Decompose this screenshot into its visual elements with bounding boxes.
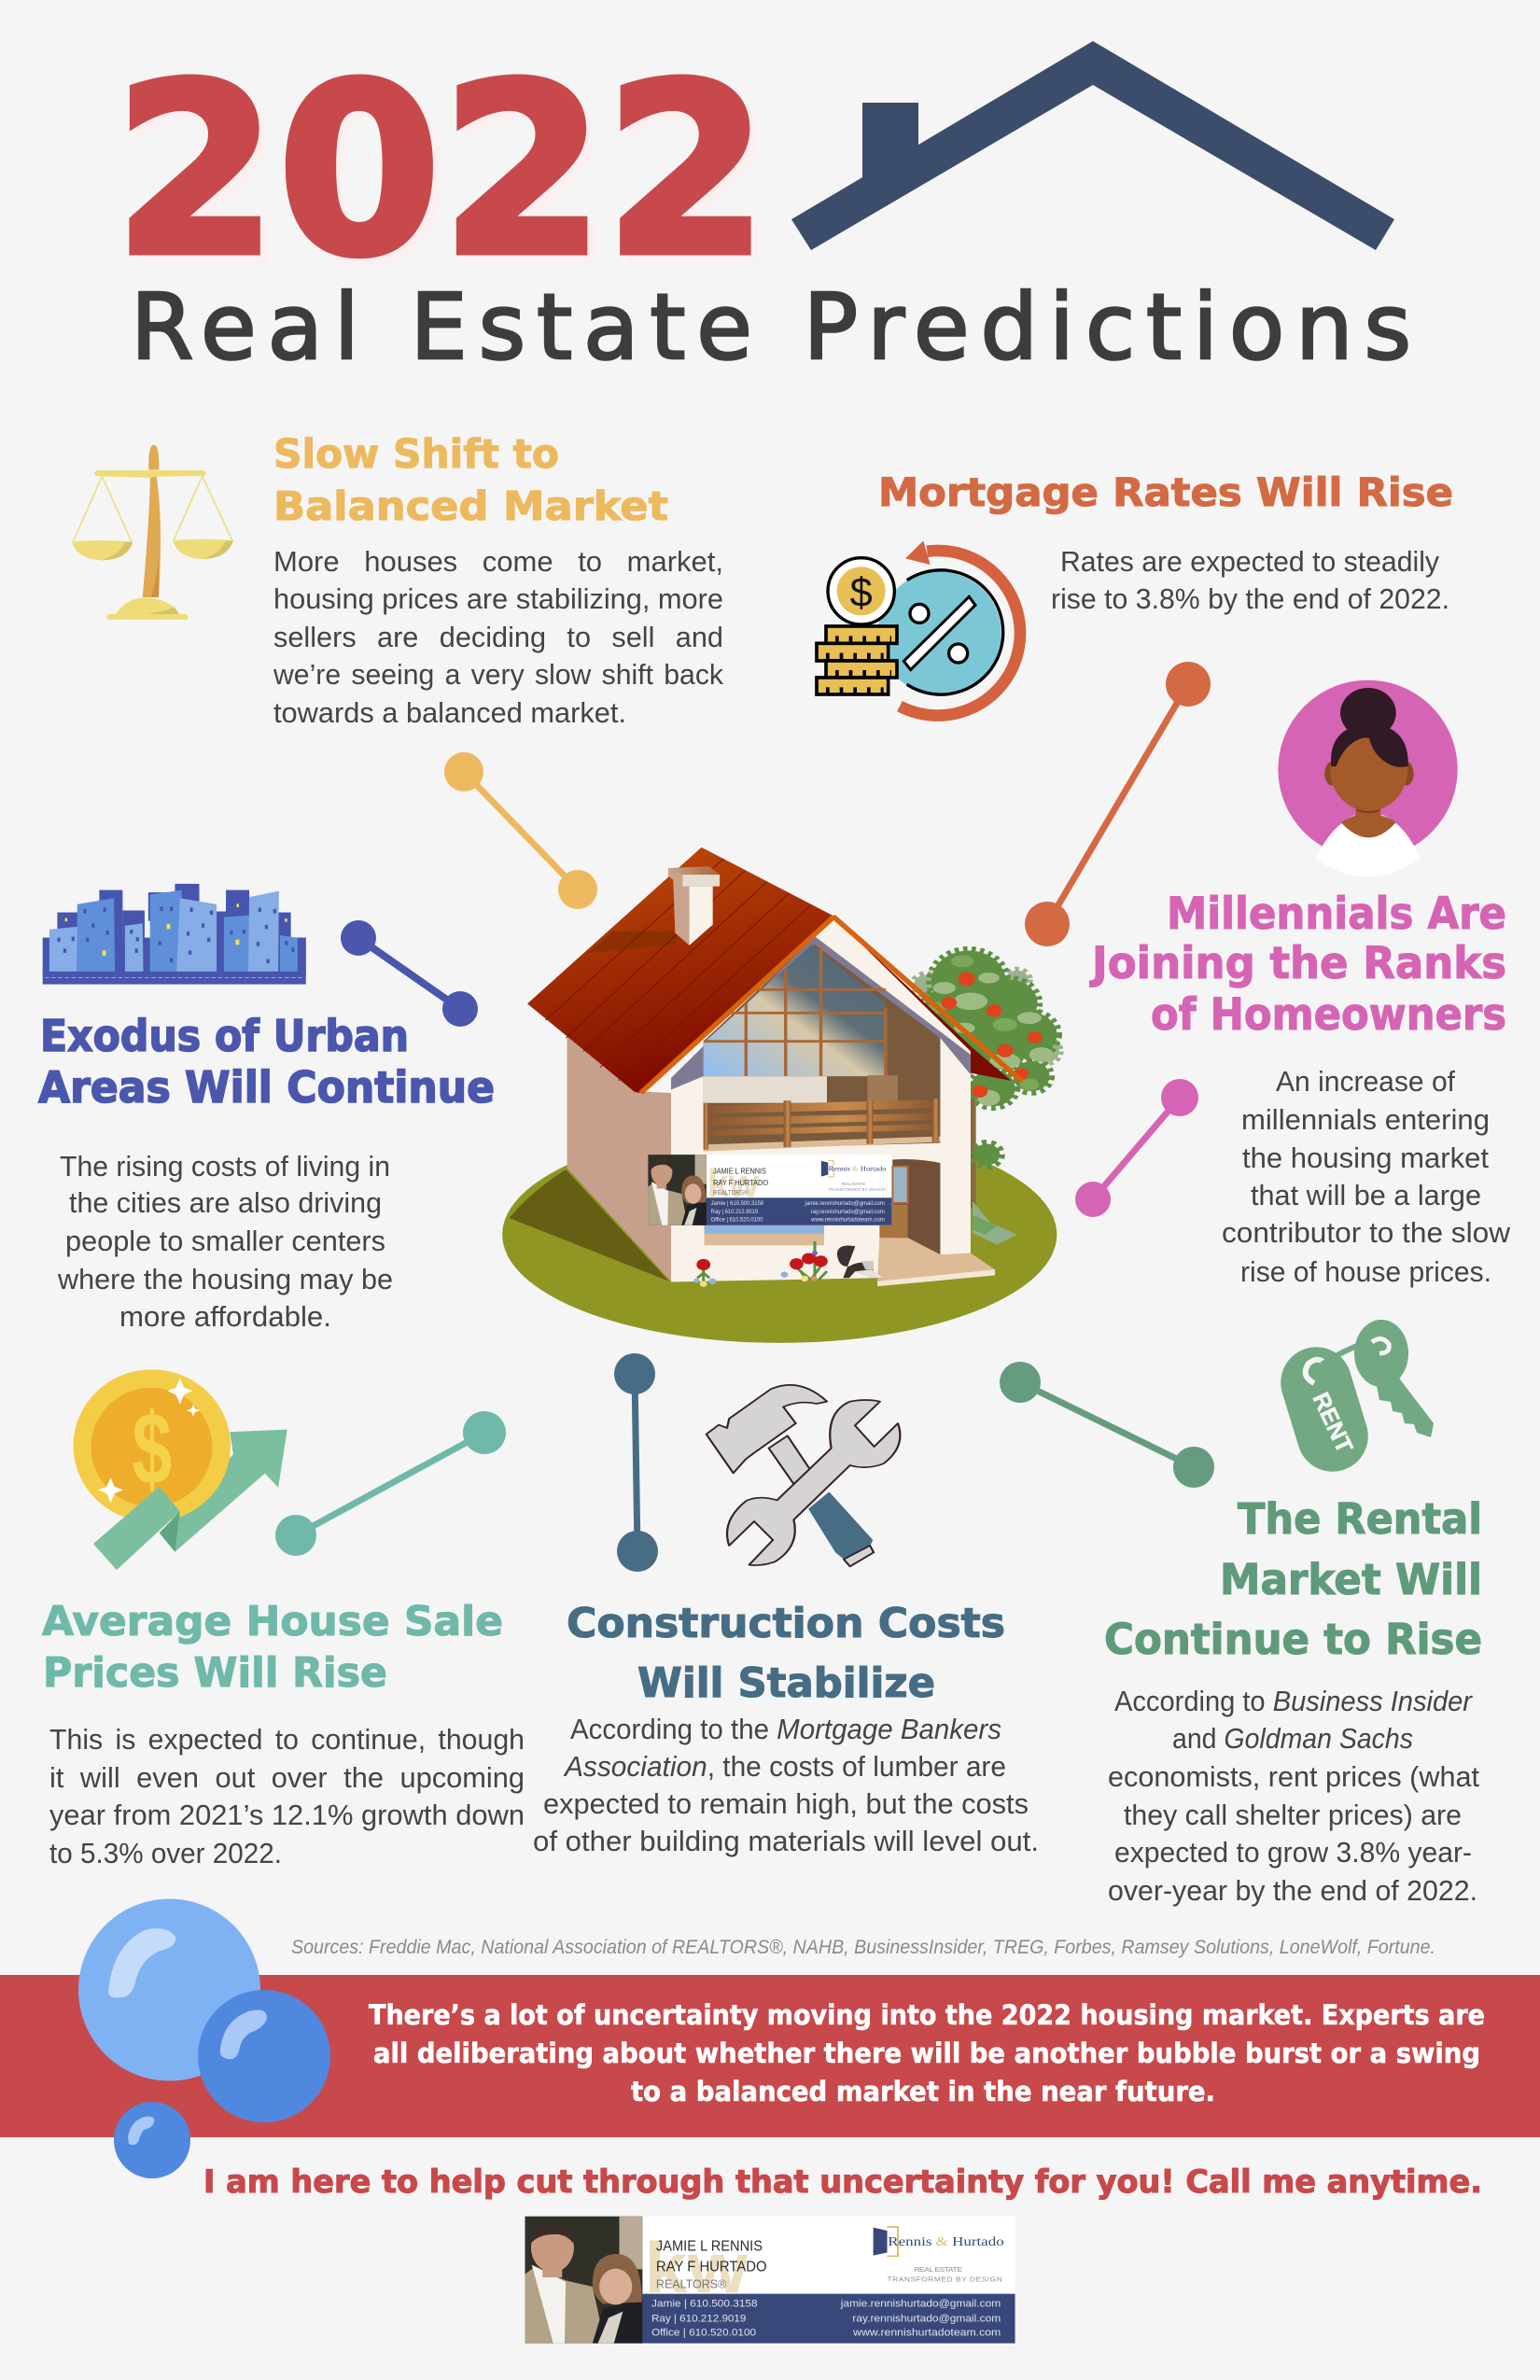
heading: The Rental <box>1238 1494 1482 1544</box>
icon: bubbles <box>78 1898 330 2178</box>
flowers <box>693 1241 828 1287</box>
heading: Exodus of Urban <box>40 1011 409 1061</box>
body text <box>49 1723 525 1869</box>
body text: where the housing may be <box>57 1263 393 1295</box>
connector <box>444 752 597 909</box>
body text: expected to remain high, but the costs <box>543 1787 1029 1820</box>
signage: agent business card: kw <box>707 1162 759 1207</box>
signage: agent business card: www.rennishurtadoteam.com <box>810 1216 885 1223</box>
signage: agent business card: jamie.rennishurtado@gmail.com <box>805 1200 885 1207</box>
signage: agent business card <box>648 1155 891 1225</box>
icon: woman portrait <box>1278 680 1458 876</box>
heading: Balanced Market <box>273 483 668 530</box>
heading: Millennials Are <box>1167 889 1506 940</box>
icon: rent tag and key <box>1272 1320 1434 1480</box>
body text: the cities are also driving <box>69 1186 382 1219</box>
heading: Prices Will Rise <box>43 1649 387 1697</box>
body text: rise of house prices. <box>1240 1255 1491 1288</box>
body text: An increase of <box>1276 1065 1455 1098</box>
title: 2022: 2022 <box>114 35 768 308</box>
banner text: all deliberating about whether there will be another bubble burst or a swing <box>373 2037 1480 2069</box>
agent business card: Jamie | 610.500.3158 <box>651 2297 758 2309</box>
signage: agent business card: Rennis & Hurtado <box>829 1165 887 1173</box>
body text <box>57 1150 393 1333</box>
walls <box>567 1034 671 1281</box>
chimney <box>668 866 720 945</box>
body text: sellers are deciding to sell and <box>273 621 723 653</box>
panel: rental market <box>1000 1320 1482 1907</box>
body text: This is expected to continue, though <box>49 1723 525 1756</box>
signage: agent business card: Ray | 610.212.9019 <box>711 1209 758 1215</box>
illustration: central house <box>502 847 1059 1343</box>
connector <box>275 1411 506 1556</box>
panel: construction costs <box>533 1353 1039 1857</box>
roof <box>527 847 834 1093</box>
porch <box>877 1238 995 1286</box>
heading <box>273 431 668 530</box>
panel: mortgage rates will rise <box>817 469 1453 946</box>
signage: agent business card: REALTORS® <box>713 1189 749 1197</box>
icon: gold coin and rising arrow <box>74 1369 287 1570</box>
connector <box>341 920 478 1027</box>
agent business card <box>525 2217 1015 2344</box>
body text: that will be a large <box>1251 1179 1481 1211</box>
body text: of other building materials will level out. <box>533 1825 1039 1857</box>
sources line: Sources: Freddie Mac, National Association of REALTORS®, NAHB, BusinessInsider, TREG, Forbes, Ramsey Solutions, LoneWolf, Fortune. <box>291 1937 1435 1958</box>
agent business card: Rennis & Hurtado <box>888 2235 1004 2249</box>
heading <box>1104 1494 1482 1664</box>
heading: Slow Shift to <box>273 431 559 478</box>
body text: the housing market <box>1242 1141 1489 1174</box>
body text: people to smaller centers <box>65 1225 385 1257</box>
body text: they call shelter prices) are <box>1124 1799 1462 1831</box>
agent business card: JAMIE L RENNIS <box>656 2239 763 2254</box>
body text: over-year by the end of 2022. <box>1108 1874 1477 1907</box>
body text: towards a balanced market. <box>273 696 626 729</box>
signage: agent business card: RAY F HURTADO <box>713 1178 768 1187</box>
lower floor door and window <box>892 1159 940 1254</box>
signage: agent business card: JAMIE L RENNIS <box>713 1167 766 1176</box>
body text: expected to grow 3.8% year- <box>1114 1836 1472 1869</box>
agent business card: kw <box>644 2229 749 2308</box>
panel: slow shift to balanced market <box>72 431 723 909</box>
panel: exodus of urban areas <box>38 884 495 1333</box>
agent business card: www.rennishurtadoteam.com <box>852 2326 1001 2338</box>
ground <box>502 1127 1057 1343</box>
body text: more affordable. <box>119 1300 331 1333</box>
body text <box>1108 1685 1479 1907</box>
heading <box>1089 889 1506 1041</box>
upper floor interior <box>704 936 940 1150</box>
agent business card: REAL ESTATE <box>914 2265 962 2274</box>
panel: millennials <box>1075 680 1511 1288</box>
icon: percent and coins <box>817 540 1020 716</box>
agent business card: Ray | 610.212.9019 <box>651 2312 747 2324</box>
heading: Joining the Ranks <box>1089 938 1506 989</box>
body text: contributor to the slow <box>1222 1216 1511 1249</box>
balcony floor and railing <box>704 1136 940 1152</box>
connector <box>614 1353 658 1572</box>
subtitle: Real Estate Predictions <box>131 274 1411 380</box>
body text: The rising costs of living in <box>60 1150 390 1183</box>
signage: agent business card: TRANSFORMED BY DESIGN <box>828 1187 886 1192</box>
icon: rent tag and key: RENT <box>1308 1389 1358 1457</box>
heading: Mortgage Rates Will Rise <box>878 469 1453 515</box>
heading: Continue to Rise <box>1104 1615 1482 1664</box>
agent business card: ray.rennishurtado@gmail.com <box>852 2312 1001 2324</box>
agent business card: RAY F HURTADO <box>656 2259 767 2275</box>
body text: rise to 3.8% by the end of 2022. <box>1051 582 1449 615</box>
body text: Rates are expected to steadily <box>1060 545 1439 578</box>
body text: millennials entering <box>1241 1103 1490 1136</box>
heading: Average House Sale <box>42 1598 503 1645</box>
body text: According to the Mortgage Bankers <box>570 1713 1001 1745</box>
body text <box>533 1713 1039 1857</box>
body text: to 5.3% over 2022. <box>49 1837 282 1869</box>
connector <box>1025 662 1211 946</box>
apple tree <box>914 951 1059 1245</box>
heading: of Homeowners <box>1151 989 1506 1041</box>
body text: we’re seeing a very slow shift back <box>273 658 723 691</box>
icon: percent and coins: $ <box>850 570 873 615</box>
body text: housing prices are stabilizing, more <box>273 582 723 615</box>
icon: balance scale <box>72 445 233 620</box>
heading: Construction Costs <box>567 1600 1005 1647</box>
body text: year from 2021’s 12.1% growth down <box>49 1799 525 1831</box>
panel: red banner <box>0 1975 1540 2137</box>
connector <box>1000 1362 1214 1488</box>
agent business card: Office | 610.520.0100 <box>651 2326 756 2338</box>
banner text: There’s a lot of uncertainty moving into the 2022 housing market. Experts are <box>369 1999 1485 2031</box>
window frames <box>704 946 886 1076</box>
body text: economists, rent prices (what <box>1108 1760 1479 1793</box>
agent business card: jamie.rennishurtado@gmail.com <box>840 2297 1001 2309</box>
icon: city skyline <box>43 884 306 985</box>
body text: it will even out over the upcoming <box>49 1761 525 1794</box>
cat <box>837 1246 884 1278</box>
signage: agent business card: REAL ESTATE <box>842 1182 865 1186</box>
agent business card: TRANSFORMED BY DESIGN <box>888 2275 1002 2283</box>
call to action: I am here to help cut through that uncertainty for you! Call me anytime. <box>203 2163 1482 2201</box>
signage: agent business card: ray.rennishurtado@gmail.com <box>811 1209 885 1215</box>
icon: roof with chimney <box>791 41 1394 250</box>
body text <box>1222 1065 1511 1288</box>
heading: Areas Will Continue <box>38 1062 495 1113</box>
heading <box>567 1600 1005 1707</box>
heading <box>38 1011 495 1113</box>
agent business card: REALTORS® <box>656 2278 726 2290</box>
body text: More houses come to market, <box>273 545 723 578</box>
body text <box>1051 545 1449 615</box>
body text: According to Business Insider <box>1114 1685 1474 1717</box>
banner text <box>369 1999 1485 2107</box>
panel: average house sale prices <box>42 1369 525 1869</box>
body text: Association, the costs of lumber are <box>563 1750 1006 1783</box>
heading: Will Stabilize <box>637 1659 935 1707</box>
heading <box>42 1598 503 1697</box>
connector <box>1075 1079 1198 1217</box>
icon: hammer and wrench <box>707 1385 900 1566</box>
icon: gold coin and rising arrow: $ <box>132 1392 172 1506</box>
body text: and Goldman Sachs <box>1172 1722 1413 1755</box>
signage: agent business card: Jamie | 610.500.3158 <box>711 1200 764 1207</box>
heading: Market Will <box>1220 1555 1482 1604</box>
body text <box>273 545 723 729</box>
banner text: to a balanced market in the near future. <box>631 2076 1215 2107</box>
signage: agent business card: Office | 610.520.0100 <box>711 1216 763 1223</box>
